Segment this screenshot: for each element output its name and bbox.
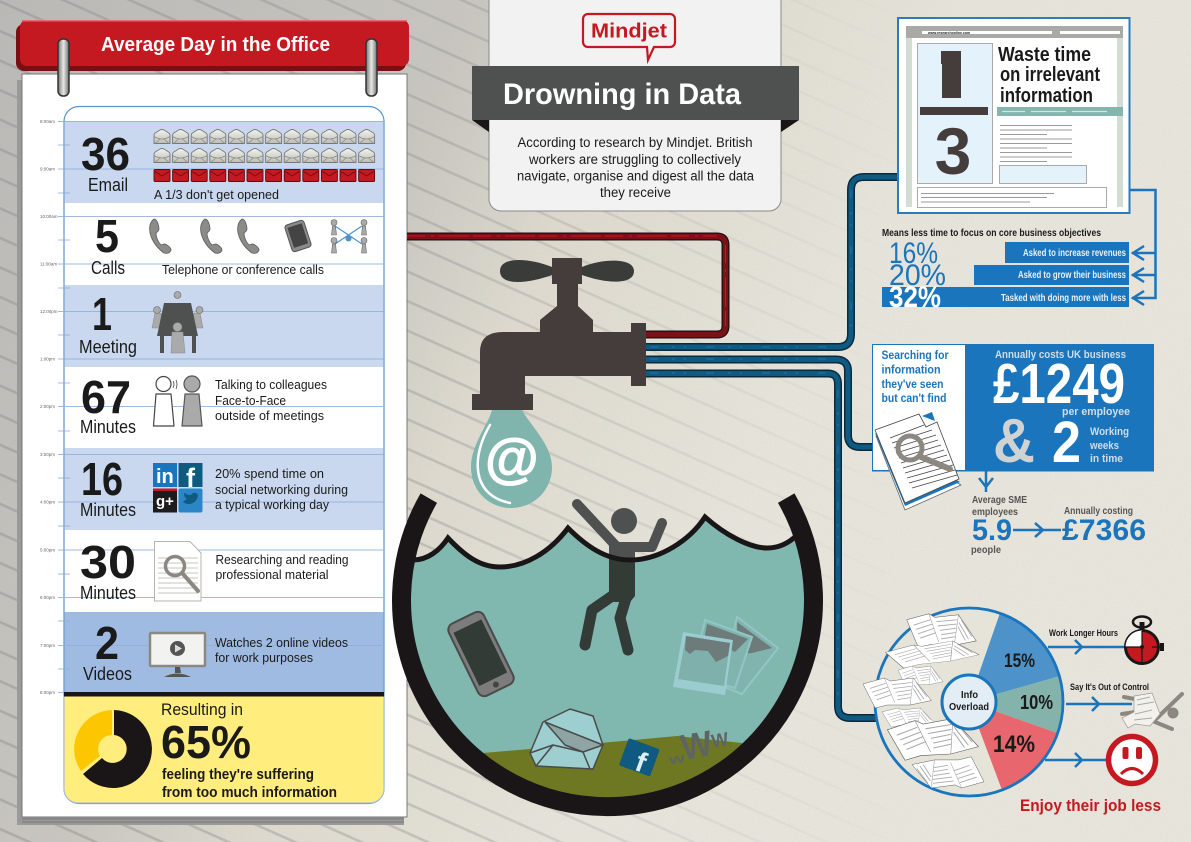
icon: person under papers	[1122, 693, 1182, 729]
intro text: According to research by Mindjet. British	[518, 135, 752, 150]
arrows: browser to bars	[1130, 190, 1156, 305]
searching text: information	[882, 364, 940, 376]
cost text: per employee	[1062, 406, 1130, 418]
arrow	[1048, 640, 1126, 654]
heading: waste time: information	[1000, 85, 1093, 107]
row: face to face: Face-to-Face	[215, 393, 286, 408]
icon: two colleagues talking	[154, 376, 202, 426]
time axis: 3:00pm	[40, 452, 55, 457]
row: calls	[91, 210, 367, 278]
outcome: work longer hours	[1048, 616, 1164, 664]
icon: social media tiles	[153, 463, 202, 512]
bar: grow business: Asked to grow their business	[1018, 270, 1126, 281]
searching text	[882, 350, 949, 405]
bowl of data	[402, 498, 813, 810]
icon: video monitor	[150, 633, 205, 677]
result: 65 percent: Resulting in	[161, 700, 243, 719]
day panel frame	[64, 106, 384, 804]
row: face to face	[80, 371, 327, 437]
browser chrome: www.researchonline.com	[927, 31, 970, 35]
row: research	[80, 536, 348, 603]
cost text: 2	[1052, 410, 1081, 475]
panel: waste time browser	[898, 18, 1130, 213]
logo: Mindjet: Mindjet	[591, 20, 667, 42]
row: social networking: Minutes	[80, 500, 136, 520]
mock article	[918, 107, 1123, 208]
outcome: out of control	[1066, 682, 1182, 729]
row: face to face: 67	[81, 371, 131, 423]
sea bed	[484, 736, 742, 798]
row: videos: Videos	[83, 664, 132, 684]
SME cost calculation: £7366	[1062, 514, 1146, 547]
calendar header band	[16, 20, 409, 71]
pie chart: info overload	[863, 608, 1063, 796]
slice: 15 percent	[969, 613, 1060, 702]
icon: smartphone	[284, 220, 312, 252]
icon: sunken phone	[446, 610, 516, 698]
row: email: A 1/3 don't get opened	[154, 187, 279, 202]
heading: waste time: on irrelevant	[1000, 64, 1100, 86]
bar: more with less: Tasked with doing more with less	[1001, 293, 1126, 304]
time axis: 1:00pm	[40, 356, 55, 362]
outcome: out of control: Say It's Out of Control	[1070, 682, 1149, 693]
row: email	[81, 128, 375, 202]
row: calls: 5	[95, 210, 119, 262]
row: face to face: outside of meetings	[215, 408, 324, 423]
icon: sunken photos	[673, 617, 778, 695]
cost text: &	[993, 407, 1035, 476]
row: research: 30	[80, 536, 136, 588]
bars: core business objectives	[882, 190, 1156, 314]
result: 65 percent: feeling they're suffering	[162, 767, 314, 783]
banner fold	[472, 120, 799, 132]
icon: sunken www: W	[678, 722, 715, 768]
icon: stopwatch	[1125, 616, 1164, 664]
pipe: red	[407, 236, 726, 334]
result: 65 percent	[74, 700, 337, 801]
panel: average day calendar	[16, 20, 409, 825]
searching text: they've seen	[882, 379, 944, 391]
icon: social media tiles: f	[186, 463, 196, 493]
row: face to face: Talking to colleagues	[215, 377, 327, 392]
SME cost calculation: 5.9	[972, 514, 1012, 547]
fraction: one third: 3	[935, 114, 971, 188]
bar: increase revenues	[1005, 242, 1129, 263]
cost text: weeks	[1089, 440, 1119, 452]
icon: document with magnifier	[154, 542, 201, 601]
percentages	[889, 237, 946, 314]
row: videos: Watches 2 online videos	[215, 635, 348, 650]
time axis: 12:00pm	[40, 309, 58, 314]
arrow	[1066, 697, 1132, 711]
slice: 10 percent	[969, 676, 1063, 733]
icon: sunken facebook tile: f	[631, 746, 651, 779]
intro text: navigate, organise and digest all the data	[517, 168, 754, 184]
wave line	[413, 517, 797, 567]
row: videos: for work purposes	[215, 650, 313, 665]
heading: waste time: Waste time	[998, 44, 1091, 66]
SME cost calculation	[971, 471, 1146, 556]
row: social networking	[80, 453, 348, 520]
row: videos: 2	[95, 617, 119, 669]
heading: waste time	[998, 44, 1100, 107]
icon: sunken www	[662, 719, 732, 771]
centre label: Overload	[949, 701, 989, 713]
flying papers	[863, 613, 984, 788]
heading: average day: Average Day in the Office	[101, 33, 330, 56]
time axis: 10:00am	[40, 214, 58, 219]
slice: 14 percent	[969, 702, 1057, 790]
icon: email envelope grid	[154, 130, 375, 182]
outcome: enjoy job less	[1020, 736, 1161, 815]
intro text: workers are struggling to collectively	[528, 152, 741, 167]
percentages: 20%	[889, 259, 946, 292]
searching text: but can't find	[882, 393, 946, 405]
row: face to face: Minutes	[80, 417, 136, 437]
bar: increase revenues: Asked to increase revenues	[1023, 248, 1126, 259]
SME cost calculation: people	[971, 544, 1001, 556]
logo: Mindjet	[583, 14, 675, 60]
time axis: 6:00pm	[40, 595, 55, 600]
icon: meeting table	[152, 292, 203, 353]
cost text: Working	[1090, 426, 1129, 438]
outcome: enjoy job less: Enjoy their job less	[1020, 797, 1161, 815]
icon: telephones	[150, 219, 259, 253]
arrow: down	[979, 471, 993, 492]
row: calls: Calls	[91, 258, 125, 278]
icon: social media tiles: in	[156, 466, 174, 488]
row: social networking: 16	[81, 453, 123, 505]
binder rings	[58, 39, 377, 96]
cost text: in time	[1090, 453, 1123, 465]
icon: tap	[472, 258, 646, 410]
icon: email drop	[471, 410, 552, 508]
pie chart: info overload: 14%	[993, 731, 1035, 758]
row: meeting	[79, 288, 203, 357]
bars: core business objectives: Means less time to focus on core business objectives	[882, 227, 1101, 239]
row: social networking: a typical working day	[215, 497, 329, 512]
donut chart	[74, 710, 152, 788]
percentages: 16%	[889, 237, 938, 270]
title banner	[472, 66, 799, 120]
pipes: blue	[644, 177, 898, 718]
time axis: 8:00am	[40, 119, 55, 124]
row: research: Minutes	[80, 583, 136, 603]
time axis: 11:00am	[40, 262, 57, 266]
searching text: Searching for	[882, 350, 949, 362]
percentages: 32%	[889, 281, 941, 314]
icon: email drop: @	[485, 427, 539, 489]
icon: conference network	[331, 220, 367, 253]
time axis: 7:00pm	[40, 643, 55, 648]
icon: sad face	[1108, 736, 1156, 784]
result: 65 percent: 65%	[161, 716, 251, 768]
centre label: Info	[961, 689, 978, 701]
outcome: work longer hours: Work Longer Hours	[1049, 628, 1118, 639]
calendar page stack	[17, 74, 407, 825]
intro text	[517, 135, 754, 200]
arrow: right	[1013, 523, 1061, 537]
centre label	[942, 675, 996, 729]
cost text	[993, 349, 1130, 476]
cost text: £1249	[993, 352, 1125, 416]
icon: papers with magnifier	[875, 412, 961, 510]
browser chrome	[906, 26, 1123, 207]
panel: searching for information	[872, 344, 1154, 510]
row: social networking: social networking during	[215, 482, 348, 497]
row: social networking: 20% spend time on	[215, 466, 324, 481]
bar: more with less	[882, 287, 1129, 307]
icon: social media tiles: g+	[156, 493, 174, 510]
time axis: 2:00pm	[40, 404, 55, 409]
water	[405, 517, 805, 810]
arrow	[1045, 753, 1108, 767]
pie chart: info overload: 10%	[1020, 692, 1053, 714]
row: email: Email	[88, 175, 128, 195]
row: meeting: 1	[92, 288, 112, 340]
result: 65 percent: from too much information	[162, 785, 337, 801]
panel: title card	[472, 0, 799, 211]
SME cost calculation: Annually costing	[1064, 505, 1133, 517]
time axis: 8:00pm	[40, 690, 55, 695]
row: research: professional material	[216, 567, 329, 582]
row: meeting: Meeting	[79, 337, 137, 357]
title banner: Drowning in Data	[503, 78, 741, 111]
SME cost calculation: Average SME	[972, 494, 1027, 506]
time axis: 5:00pm	[40, 548, 55, 552]
time axis: 9:00am	[40, 166, 55, 172]
row: research: Researching and reading	[216, 552, 348, 567]
fraction: one third	[918, 44, 992, 188]
SME cost calculation: employees	[972, 506, 1018, 518]
icon: sunken www: W	[710, 729, 730, 753]
pie chart: info overload: 15%	[1004, 651, 1035, 672]
row: calls: Telephone or conference calls	[162, 262, 324, 277]
icon: drowning person	[577, 504, 662, 650]
time axis	[40, 119, 384, 695]
intro text: they receive	[600, 185, 671, 200]
icon: sunken www: w	[666, 750, 688, 768]
icon: sunken facebook tile	[617, 738, 660, 781]
row: videos	[83, 617, 348, 684]
bar: grow business	[974, 265, 1129, 285]
row: email: 36	[81, 128, 130, 180]
bowl rim	[402, 498, 813, 807]
cost text: Annually costs UK business	[995, 349, 1126, 361]
time axis: 4:00pm	[40, 500, 55, 504]
icon: sunken envelope	[530, 709, 603, 769]
